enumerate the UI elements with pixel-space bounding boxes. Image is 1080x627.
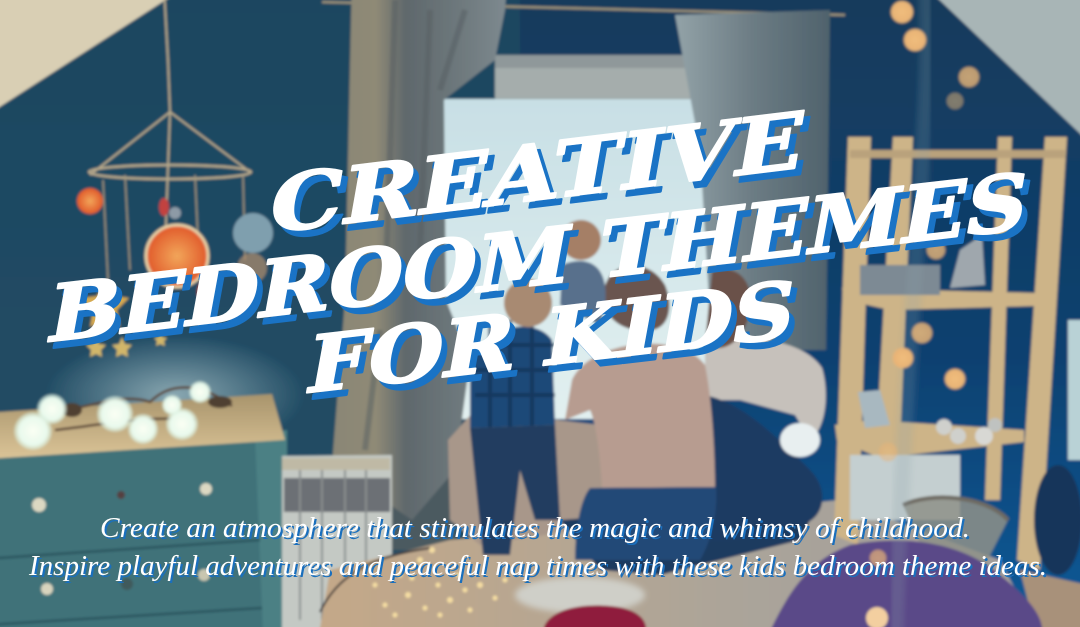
pillow beige <box>448 410 610 545</box>
title line: creative: CREATIVE <box>268 99 818 258</box>
ceiling left <box>0 0 212 126</box>
subtitle line 2: Inspire playful adventures and peaceful nap times with these kids bedroom theme ideas. <box>28 550 1047 582</box>
subtitle line 2: Inspire playful adventures and peaceful nap times with these kids bedroom theme ideas. <box>30 552 1049 584</box>
curtain left folds <box>365 0 465 450</box>
ceiling right <box>908 0 1080 162</box>
under curtain shadow <box>385 470 455 550</box>
man: sweater and jeans <box>700 269 826 541</box>
subtitle line 1: Create an atmosphere that stimulates the magic and whimsy of childhood. <box>100 512 970 544</box>
bed <box>315 500 1050 627</box>
red hat <box>544 605 646 627</box>
baby <box>560 220 606 325</box>
subtitle <box>28 512 1049 584</box>
fairy lights on bed <box>372 547 508 618</box>
title: Creative Bedroom Themes for Kids <box>39 92 1043 419</box>
shelf objects <box>858 235 1002 445</box>
mother: sweater and jeans <box>565 265 716 560</box>
stars <box>86 333 167 357</box>
basket <box>903 497 1008 565</box>
dresser top <box>0 394 285 460</box>
title line: bedroom themes: BEDROOM THEMES <box>40 154 1036 361</box>
white blanket tuft <box>515 577 645 613</box>
title line: bedroom themes: BEDROOM THEMES <box>46 161 1042 367</box>
man: hand <box>780 423 820 457</box>
shelf unit <box>834 137 1067 570</box>
wall right <box>520 0 1080 627</box>
curtain rod <box>322 2 845 15</box>
floor <box>1020 570 1080 627</box>
curtain right <box>675 10 830 350</box>
man: head <box>705 269 751 348</box>
subtitle line 1: Create an atmosphere that stimulates the magic and whimsy of childhood. <box>102 514 972 546</box>
planet: blue <box>233 213 273 253</box>
dresser <box>0 394 287 627</box>
cable on bed <box>320 548 430 612</box>
right edge window strip <box>1068 320 1080 460</box>
window <box>440 55 710 419</box>
planet: saturn <box>197 280 213 304</box>
curtain left <box>332 0 508 520</box>
wall glow <box>45 335 305 455</box>
mother: hair <box>603 265 669 331</box>
radiator <box>282 455 392 627</box>
boy: checked shirt and jeans <box>470 279 560 555</box>
bokeh string lights <box>866 0 980 627</box>
mobile: strings and planets <box>77 0 273 357</box>
white radiator right <box>850 455 960 520</box>
fan right <box>1034 465 1080 575</box>
title line: creative: CREATIVE <box>263 93 812 252</box>
planet: sun <box>146 225 208 287</box>
title line: for kids: FOR KIDS <box>299 262 803 412</box>
knobs <box>32 498 46 512</box>
purple pillow <box>760 540 1050 627</box>
planet: beige <box>237 253 267 283</box>
shadow under family <box>560 500 820 575</box>
title line: for kids: FOR KIDS <box>305 269 809 418</box>
boy: head <box>504 279 552 327</box>
planet: orange <box>77 188 103 214</box>
wall left <box>0 0 520 627</box>
planet: red <box>159 198 169 216</box>
planet: grey <box>169 207 181 219</box>
string lights on dresser <box>14 381 232 450</box>
